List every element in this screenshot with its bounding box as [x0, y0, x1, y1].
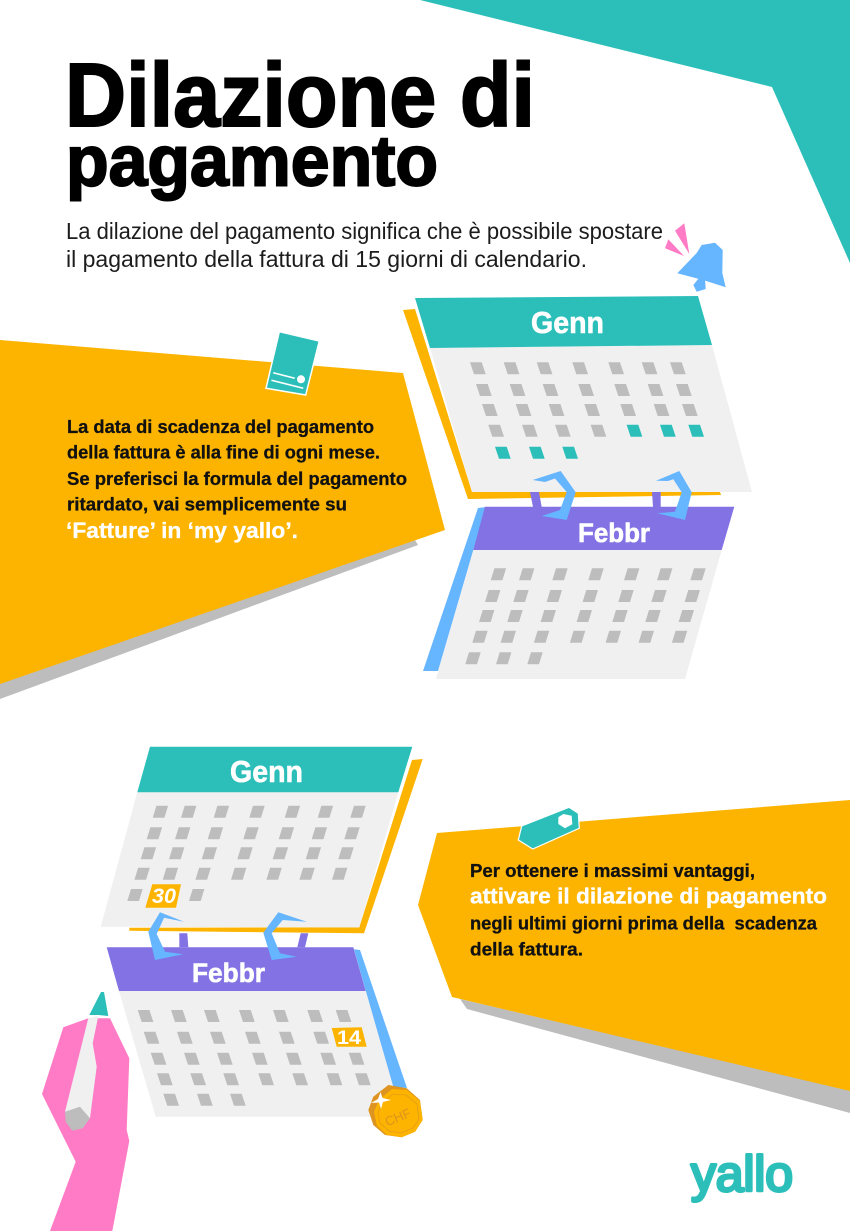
intro text: La dilazione del pagamento significa che è possibile spostare	[66, 218, 663, 244]
day cells	[465, 568, 706, 664]
title: Dilazione di	[65, 46, 535, 146]
calendar: Febbraio bottom	[107, 947, 407, 1117]
panel text: due date: Se preferisci la formula del pagamento	[67, 468, 407, 489]
date badge 30: 30	[152, 885, 176, 908]
title	[65, 46, 535, 202]
intro text	[66, 218, 663, 272]
panel text: due date: ritardato, vai semplicemente su	[67, 494, 347, 514]
icon: CHF coin: CHF	[383, 1105, 413, 1129]
calendar: Gennaio bottom	[101, 747, 423, 933]
panel text: activation tip: della fattura.	[470, 938, 583, 960]
panel text: activation tip: Per ottenere i massimi vantaggi,	[470, 860, 755, 881]
date badge 14	[332, 1027, 367, 1049]
month label: Genn	[230, 754, 303, 789]
month label: Febbr	[192, 958, 265, 988]
day cells	[138, 1010, 371, 1106]
icon: bell	[665, 223, 726, 292]
month label: Febbr	[578, 518, 650, 548]
date badge 30	[145, 884, 181, 908]
month label: Genn	[531, 305, 604, 340]
day cells teal	[495, 425, 704, 459]
icon: CHF coin	[368, 1085, 423, 1137]
calendar: Febbraio top	[423, 507, 734, 679]
calendar rings: bottom pair	[148, 912, 308, 960]
panel: due date	[0, 340, 445, 699]
panel text: due date: della fattura è alla fine di ogni mese.	[67, 442, 380, 462]
calendar: Gennaio top	[403, 296, 752, 499]
panel text: due date: La data di scadenza del pagamento	[67, 416, 374, 437]
intro text: il pagamento della fattura di 15 giorni di calendario.	[66, 246, 587, 272]
panel text: due date: ‘Fatture’ in ‘my yallo’.	[66, 518, 298, 543]
top-right teal corner shape	[420, 0, 850, 263]
panel text: due date	[66, 416, 407, 543]
title: pagamento	[66, 122, 438, 202]
day cells	[127, 806, 366, 901]
day cells grey	[470, 362, 698, 437]
logo: yallo: yallo	[691, 1146, 793, 1202]
icon: invoice document	[266, 332, 319, 395]
illustration: hand holding pencil	[42, 992, 129, 1231]
date badge 14: 14	[337, 1028, 361, 1049]
icon: tag	[518, 807, 579, 849]
panel text: activation tip	[470, 860, 827, 960]
panel text: activation tip: attivare il dilazione di pagamento	[470, 884, 827, 908]
panel text: activation tip: negli ultimi giorni prima della scadenza	[470, 912, 818, 934]
calendar rings: top pair	[530, 471, 692, 520]
panel: activation tip	[418, 800, 850, 1113]
